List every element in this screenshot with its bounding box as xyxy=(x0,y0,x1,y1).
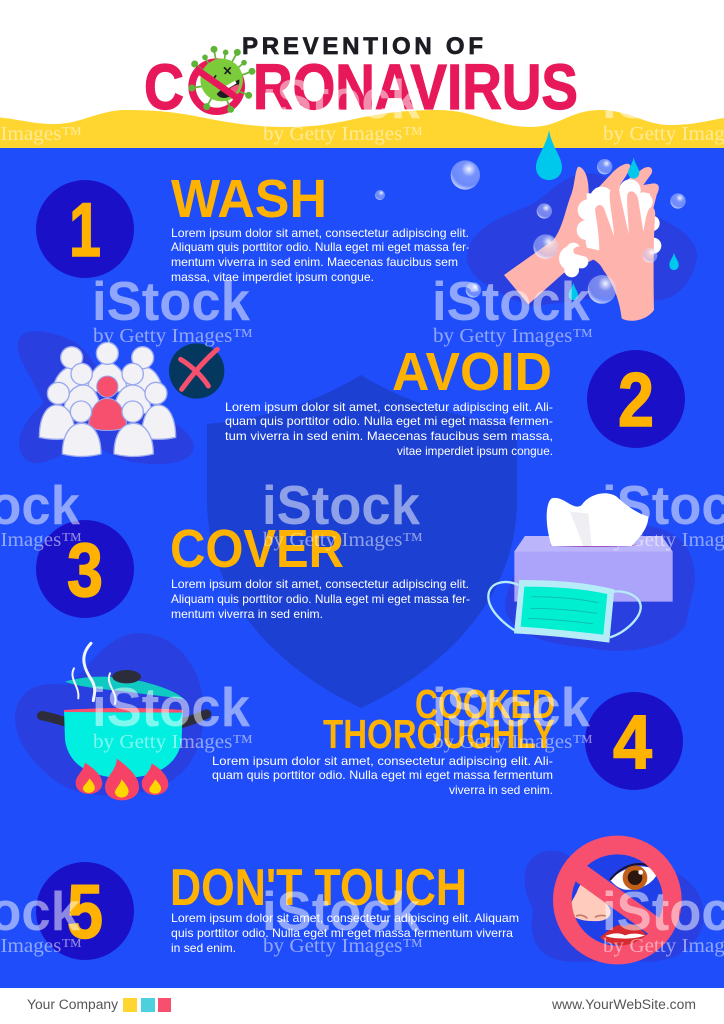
panel: cooked thoroughly xyxy=(15,633,683,800)
icon: washing hands xyxy=(451,130,697,321)
icon: tissue box and mask xyxy=(488,493,673,643)
icon: no touching face xyxy=(525,845,704,962)
heading: avoid: AVOID xyxy=(392,342,552,402)
number badge 3 xyxy=(36,520,134,618)
number badge 4: 4 xyxy=(613,700,652,785)
icon: crowd of people xyxy=(18,331,224,464)
text block: wash xyxy=(171,226,470,284)
footer: company name: Your Company xyxy=(27,997,118,1012)
text block: cover: Lorem ipsum dolor sit amet, consectetur adipiscing elit. xyxy=(171,577,469,591)
heading: cover: COVER xyxy=(170,519,344,579)
icon: small bubble xyxy=(375,190,385,200)
text block: avoid: vitae imperdiet ipsum congue. xyxy=(397,444,553,458)
watermark overlay: by Getty Images™ xyxy=(263,529,423,551)
panel: wash xyxy=(36,130,697,321)
watermark overlay: iStock xyxy=(92,676,250,738)
number badge 1 xyxy=(36,180,134,278)
text block: cooked thoroughly xyxy=(212,754,553,797)
watermark overlay: iStock xyxy=(262,474,420,536)
text block: cover: mentum viverra in sed enim. xyxy=(171,607,323,621)
header: yellow wave band xyxy=(0,110,724,148)
text block: wash: Aliquam quis porttitor odio. Nulla eget mi eget massa fer- xyxy=(171,240,470,254)
text block: don't touch: quis porttitor odio. Nulla eget mi eget massa fermentum viverra xyxy=(171,926,513,940)
panel: cover xyxy=(36,493,695,651)
text block: cooked thoroughly: Lorem ipsum dolor sit amet, consectetur adipiscing elit. Ali- xyxy=(212,754,553,768)
watermark overlay: by Getty Images™ xyxy=(93,731,253,753)
title line: coronavirus: O xyxy=(192,51,242,123)
number badge 2: 2 xyxy=(618,358,654,443)
text block: avoid: quam quis porttitor odio. Nulla eget mi eget massa fermen- xyxy=(225,414,553,428)
watermark overlay: iStock xyxy=(92,270,250,332)
icon: tissue blob xyxy=(505,525,695,651)
number badge 5 xyxy=(36,862,134,960)
text block: don't touch: in sed enim. xyxy=(171,941,236,955)
watermark overlay: by Getty Images™ xyxy=(433,325,593,347)
footer: website: www.YourWebSite.com xyxy=(551,997,696,1012)
text block: avoid: tum viverra in sed enim. Maecenas faucibus sem massa, xyxy=(225,429,553,443)
watermark overlay: by Getty Images™ xyxy=(433,731,593,753)
text block: cover: Aliquam quis porttitor odio. Nulla eget mi eget massa fer- xyxy=(171,592,470,606)
watermark overlay: by Getty Images™ xyxy=(93,325,253,347)
watermark overlay: iStock xyxy=(262,68,420,130)
number badge 2 xyxy=(587,350,685,448)
number badge 3: 3 xyxy=(67,528,103,613)
footer: colour squares xyxy=(123,998,171,1012)
title line: coronavirus: C xyxy=(144,51,184,123)
heading: cooked thoroughly xyxy=(323,681,555,757)
text block: cover xyxy=(171,577,470,621)
text block: cooked thoroughly: viverra in sed enim. xyxy=(449,783,553,797)
text block: wash: massa, vitae imperdiet ipsum congue. xyxy=(171,270,374,284)
text block: wash: mentum viverra in sed enim. Maecenas faucibus sem xyxy=(171,255,458,269)
watermark overlay: iStock xyxy=(432,270,590,332)
heading: don't touch: DON'T TOUCH xyxy=(170,859,467,917)
panel: don't touch xyxy=(36,845,704,962)
text block: don't touch: Lorem ipsum dolor sit amet, consectetur adipiscing elit. Aliquam xyxy=(171,911,519,925)
number badge 1: 1 xyxy=(69,188,101,273)
panel: avoid xyxy=(18,331,685,464)
icon: virus with prohibition sign xyxy=(189,47,255,112)
watermark overlay: by Getty Images™ xyxy=(263,123,423,145)
text block: avoid xyxy=(225,400,553,458)
watermark overlay: iStock xyxy=(432,676,590,738)
text block: don't touch xyxy=(171,911,519,955)
text block: cooked thoroughly: quam quis porttitor odio. Nulla eget mi eget massa fermentum xyxy=(212,768,553,782)
header: white title area xyxy=(0,0,724,140)
footer xyxy=(0,988,724,1024)
heading: cooked thoroughly: THOROUGHLY xyxy=(323,711,555,757)
decorative shield xyxy=(207,375,517,708)
number badge 4 xyxy=(585,692,683,790)
title xyxy=(144,33,578,123)
text block: avoid: Lorem ipsum dolor sit amet, consectetur adipiscing elit. Ali- xyxy=(225,400,553,414)
number badge 5: 5 xyxy=(67,870,103,955)
title line: coronavirus xyxy=(144,51,578,123)
heading: wash: WASH xyxy=(171,169,327,229)
text block: wash: Lorem ipsum dolor sit amet, consectetur adipiscing elit. xyxy=(171,226,469,240)
title line: coronavirus: RONAVIRUS xyxy=(253,51,578,123)
icon: boiling pot xyxy=(15,633,207,800)
heading: cooked thoroughly: COOKED xyxy=(415,681,555,727)
watermark overlay: iStock xyxy=(262,880,420,942)
watermark overlay: by Getty Images™ xyxy=(263,935,423,957)
title line: prevention of: PREVENTION OF xyxy=(242,33,483,60)
